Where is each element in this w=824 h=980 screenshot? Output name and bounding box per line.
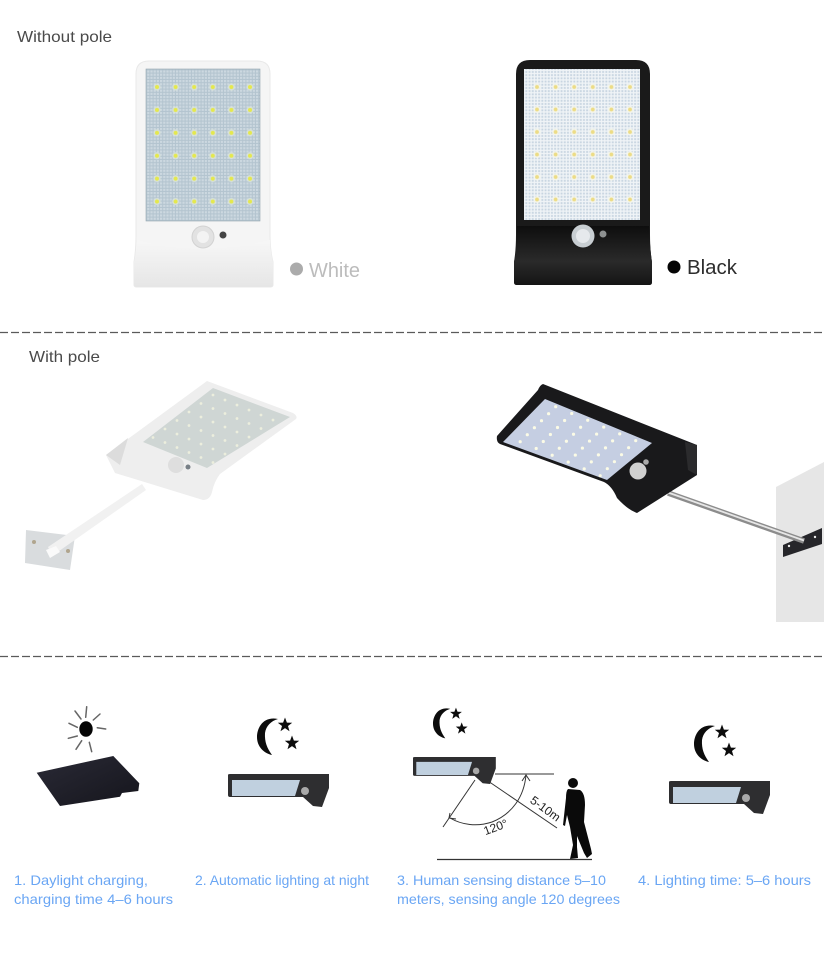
wall [776, 462, 824, 622]
legend: black colour: Black [687, 257, 738, 279]
heading: without pole: Without pole [17, 29, 112, 46]
icon: walking person [563, 778, 592, 859]
caption: step 3: meters, sensing angle 120 degrees [397, 891, 620, 907]
caption: step 4: 4. Lighting time: 5–6 hours [638, 872, 811, 888]
diagram: sensing range: 120° [482, 816, 510, 838]
legend: white colour: White [309, 260, 360, 282]
product: black lamp front view [514, 60, 652, 285]
caption: step 2: 2. Automatic lighting at night [195, 872, 369, 888]
heading: with pole: With pole [29, 349, 100, 366]
icon: solar panel [37, 756, 139, 806]
icon: moon and stars, step 4 [694, 724, 736, 762]
diagram: sensing range: 5-10m [527, 793, 563, 824]
icon: lamp, step 3 [413, 757, 496, 784]
product: white lamp front view [134, 61, 273, 287]
caption: step 3: 3. Human sensing distance 5–10 [397, 872, 606, 888]
product: black lamp with pole and bracket [497, 384, 822, 557]
icon: moon and stars, step 3 [433, 708, 468, 738]
legend: black colour [668, 257, 738, 279]
icon: moon and stars, step 2 [257, 718, 299, 755]
icon: sun [68, 707, 106, 752]
icon: lamp, step 4 [669, 781, 770, 814]
product: white lamp with pole [25, 381, 297, 570]
icon: lamp, step 2 [228, 774, 329, 807]
caption: step 1: charging time 4–6 hours [14, 891, 173, 907]
diagram: sensing range [437, 774, 592, 860]
caption: step 1: 1. Daylight charging, [14, 872, 148, 888]
